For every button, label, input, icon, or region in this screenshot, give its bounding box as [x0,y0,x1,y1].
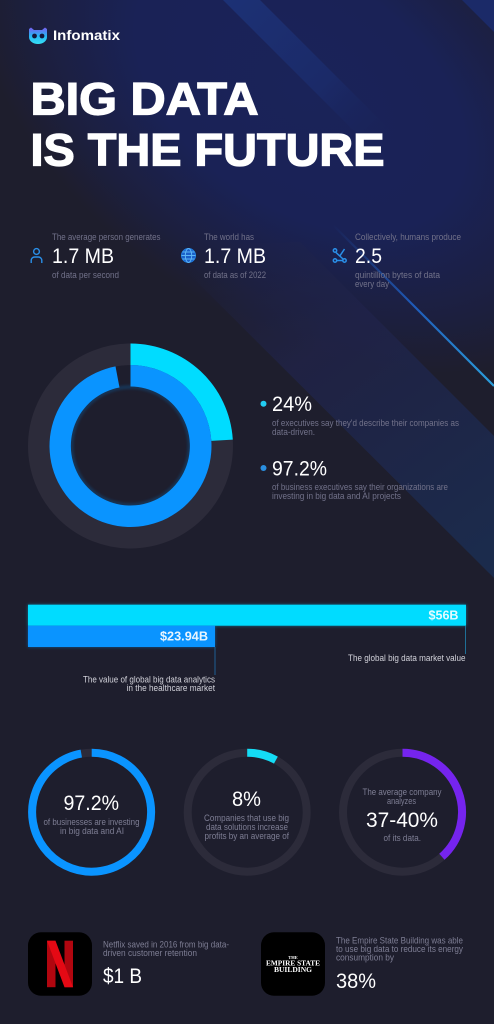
stat: world data: 1.7 MB [204,245,266,268]
donut segment: 97.2% [49,365,211,527]
stat: 97.2% [260,457,448,501]
title: IS THE FUTURE [30,124,384,176]
icon: globe [182,248,196,262]
ring: 37-40%: The average company [362,787,442,797]
ring: 37-40%: of its data. [384,833,421,843]
empire state card: to use big data to reduce its energy [336,944,463,954]
stat: person data per second: The average person generates [52,232,161,242]
label: healthcare value: in the healthcare market [126,683,215,693]
icon: logo mascot [29,28,47,44]
stat: 24%: of executives say they'd describe their companies as [272,418,459,428]
icon: empire state logo: THE [288,955,298,960]
logo: Infomatix [29,28,121,44]
icon: netflix logo [28,932,92,996]
donut chart [39,344,233,538]
ring: 8% [188,753,307,872]
icon: empire state logo: BUILDING [274,965,312,974]
empire state card: consumption by [336,952,394,962]
label: healthcare value [83,675,215,693]
stat: person data per second: 1.7 MB [52,245,114,268]
stat: 24%: 24% [272,393,312,416]
label: market value: The global big data market value [348,653,466,663]
icon: person [31,249,42,263]
stat: humans produce [333,232,461,289]
stat: 24% [260,393,459,437]
empire state card [261,932,463,996]
title: BIG DATA [30,74,258,124]
ring: 37-40%: 37-40% [366,809,438,832]
empire state card: 38% [336,970,376,993]
netflix card: $1 B [103,965,142,988]
ring: 8%: 8% [232,788,261,811]
label: healthcare value: The value of global big data analytics [83,675,215,685]
stat: world data: The world has [204,232,254,242]
ring: 8%: data solutions increase [206,822,288,832]
stat: person data per second [31,232,161,280]
stat: 97.2%: investing in big data and AI projects [272,491,401,501]
bar: $56B [28,605,466,626]
netflix card [28,932,229,996]
logo: Infomatix: Infomatix [53,28,121,43]
ring: 8%: profits by an average of [204,831,289,841]
icon: empire state logo [261,932,325,996]
stat: humans produce: Collectively, humans produce [355,232,461,242]
stat: world data [182,232,266,280]
title [30,74,384,176]
bar chart [28,605,466,693]
stat: world data: of data as of 2022 [204,270,266,280]
bar: $56B: $56B [428,608,458,622]
netflix card: Netflix saved in 2016 from big data- [103,940,229,950]
ring: 97.2%: of businesses are investing [44,817,140,827]
stat: humans produce: quintillion bytes of data [355,270,440,280]
stat: humans produce: 2.5 [355,245,382,268]
netflix card: driven customer retention [103,948,197,958]
bar: $23.94B: $23.94B [160,630,208,644]
ring: 37-40%: analyzes [387,796,416,806]
ring: 97.2%: 97.2% [64,792,119,815]
stat: person data per second: of data per second [52,270,119,280]
stat: 97.2%: of business executives say their organizations are [272,482,448,492]
empire state card: The Empire State Building was able [336,935,463,945]
ring: 8%: Companies that use big [204,813,289,823]
ring: 97.2% [32,753,151,872]
icon: network [333,249,346,262]
ring: 97.2%: in big data and AI [60,826,124,836]
stat: 97.2%: 97.2% [272,457,327,480]
donut segment: 24% [130,344,233,441]
ring: 37-40% [343,753,462,872]
bar: $23.94B [28,626,215,647]
stat: 24%: data-driven. [272,427,315,437]
icon: empire state logo: EMPIRE STATE [266,959,320,968]
stat: humans produce: every day [355,279,389,289]
